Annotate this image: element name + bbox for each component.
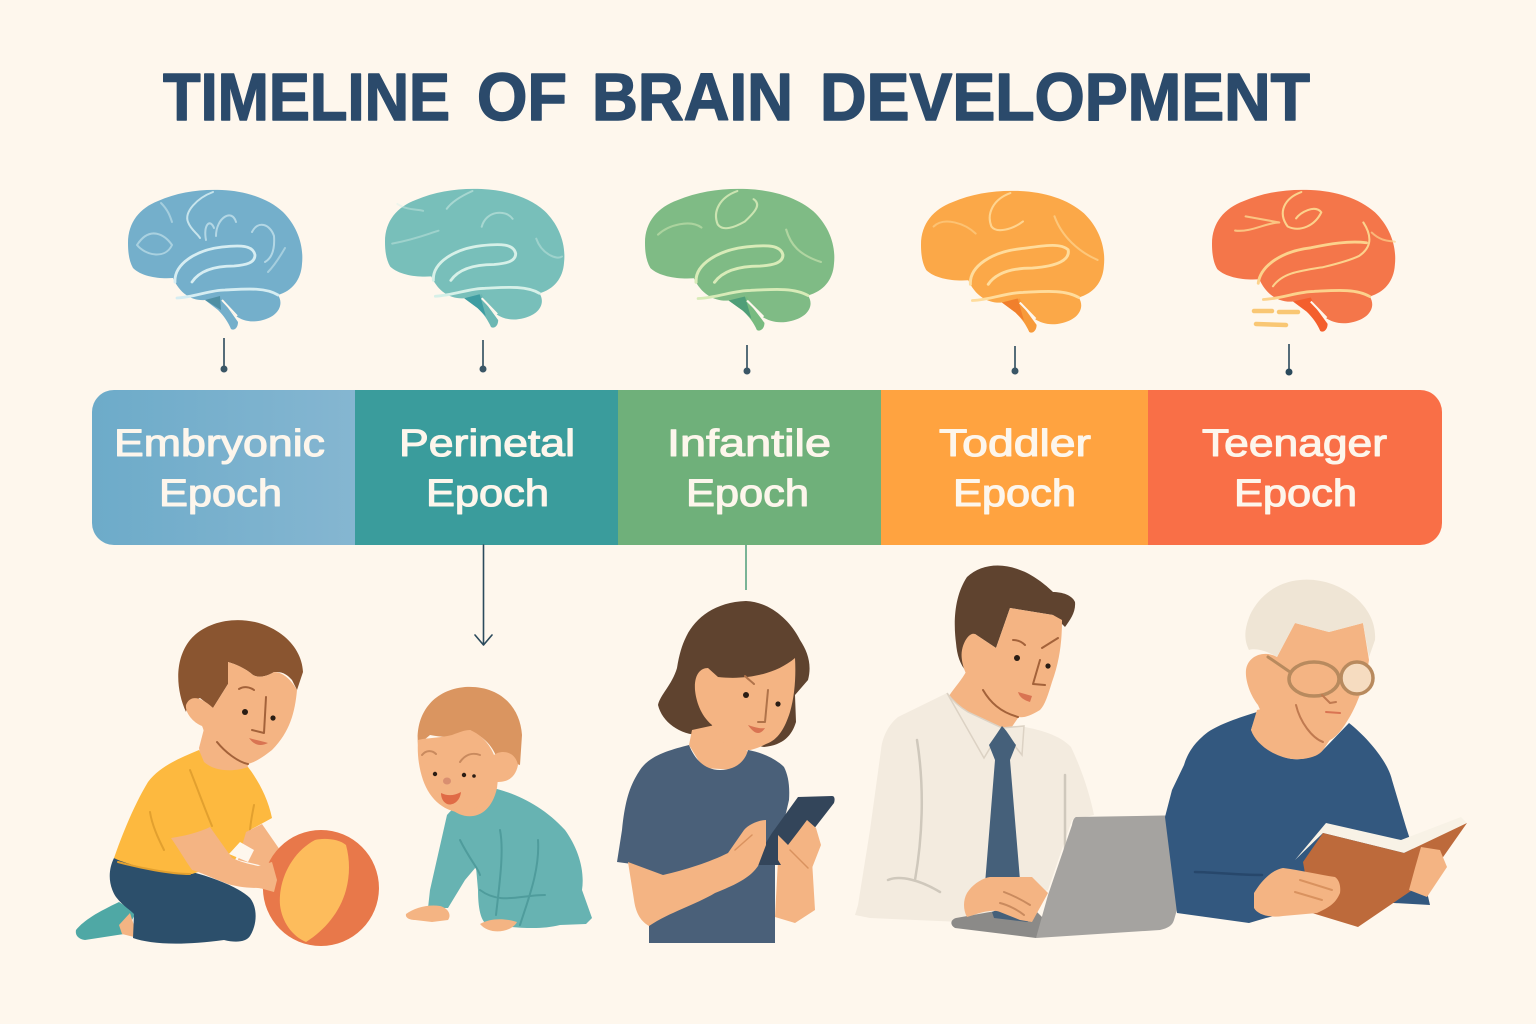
arrow: perinetal down bbox=[475, 545, 492, 645]
brain: perinetal bbox=[385, 189, 564, 328]
label: toddler epoch bbox=[939, 423, 1091, 515]
label: teenager epoch: Teenager bbox=[1202, 423, 1387, 465]
title bbox=[163, 60, 1310, 135]
title: BRAIN bbox=[592, 60, 793, 135]
epoch timeline band bbox=[92, 390, 1442, 545]
title: DEVELOPMENT bbox=[820, 60, 1310, 135]
label: perinetal epoch: Epoch bbox=[426, 473, 549, 515]
line: infantile down bbox=[745, 545, 747, 590]
label: infantile epoch bbox=[667, 423, 831, 515]
brain: teenager bbox=[1212, 190, 1395, 332]
connector: toddler bbox=[1012, 346, 1018, 374]
label: infantile epoch: Infantile bbox=[667, 423, 831, 465]
label: teenager epoch bbox=[1202, 423, 1387, 515]
figure: crawling baby bbox=[406, 687, 592, 931]
figure: woman with tablet bbox=[617, 601, 835, 943]
brain: toddler bbox=[921, 191, 1104, 333]
label: toddler epoch: Epoch bbox=[953, 473, 1076, 515]
label: embryonic epoch: Epoch bbox=[159, 473, 282, 515]
label: toddler epoch: Toddler bbox=[939, 423, 1091, 465]
label: teenager epoch: Epoch bbox=[1234, 473, 1357, 515]
label: infantile epoch: Epoch bbox=[686, 473, 809, 515]
connector: embryonic bbox=[220, 338, 228, 372]
brain: embryonic bbox=[128, 190, 302, 330]
label: perinetal epoch bbox=[399, 423, 575, 515]
figure: boy with ball bbox=[76, 620, 379, 946]
connector: teenager bbox=[1286, 344, 1292, 376]
title: TIMELINE bbox=[163, 60, 450, 135]
title: OF bbox=[477, 60, 567, 135]
label: embryonic epoch: Embryonic bbox=[114, 423, 325, 465]
figure: man with laptop bbox=[855, 566, 1201, 938]
connector: infantile bbox=[744, 345, 750, 374]
brain: infantile bbox=[645, 189, 834, 331]
figure: older man reading bbox=[1165, 580, 1467, 927]
connector: perinetal bbox=[480, 340, 486, 372]
label: embryonic epoch bbox=[114, 423, 325, 515]
label: perinetal epoch: Perinetal bbox=[399, 423, 575, 465]
